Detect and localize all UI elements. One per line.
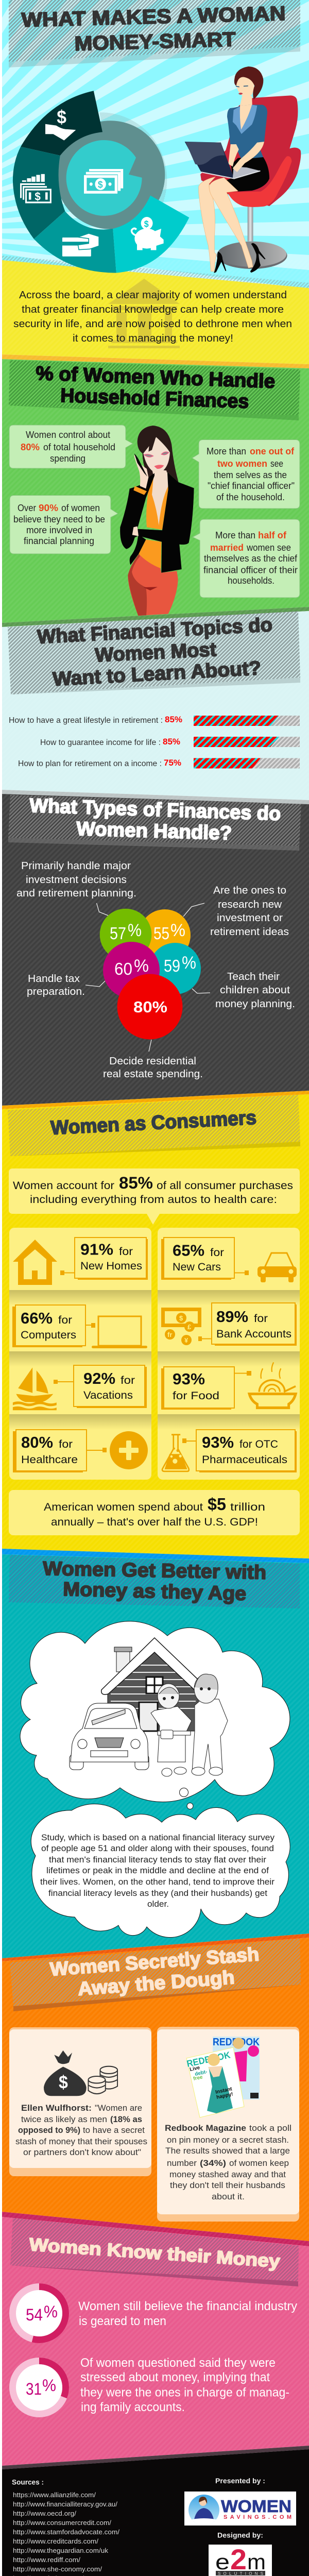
thought cloud: study text: their lives. Women, on the other hand, tend to improve their bbox=[40, 1877, 274, 1887]
text: stressed about money: ing family accounts. bbox=[81, 2400, 185, 2414]
text: stressed about money: stressed about money, implying that bbox=[80, 2370, 270, 2384]
icon: bars and banknotes bbox=[20, 174, 52, 204]
panel: $5 trillion: annually – that's over half the U.S. GDP! bbox=[51, 1516, 258, 1528]
illustration: car bbox=[70, 1703, 149, 1770]
item: OTC pharmaceuticals: 93% bbox=[202, 1433, 234, 1451]
item: bank accounts: for bbox=[254, 1312, 268, 1325]
donut: 31%: % bbox=[42, 2376, 56, 2395]
callout: half of married women: More than bbox=[215, 530, 255, 540]
heading: secret stash: Away the Dough bbox=[77, 1967, 235, 1999]
icon: banknote stack bbox=[84, 169, 123, 194]
value: 59%: % bbox=[182, 953, 196, 973]
heading: financial topics: Women Most bbox=[94, 639, 217, 666]
icon: currency coins: $ bbox=[179, 1314, 183, 1322]
item: new homes bbox=[13, 1238, 148, 1285]
item: new cars: New Cars bbox=[173, 1261, 221, 1273]
item: healthcare: for bbox=[59, 1438, 73, 1450]
item: vacations: 92% bbox=[83, 1369, 115, 1387]
callout: 90% of women: financial planning bbox=[24, 536, 94, 546]
sources list: http://www.stamfordadvocate.com/ bbox=[13, 2529, 120, 2536]
icon: card and hand bbox=[62, 233, 99, 257]
panel: $5 trillion: $5 bbox=[208, 1495, 226, 1514]
panel: 85% of consumer purchases: Women account for bbox=[13, 1179, 114, 1192]
logo: e2m Solutions bbox=[209, 2531, 272, 2576]
panel: Ellen Wulfhorst quote: "Women are bbox=[95, 2104, 142, 2113]
heading: better with age bbox=[9, 1555, 300, 1608]
text: stressed about money bbox=[80, 2356, 289, 2414]
panel: Ellen Wulfhorst quote: Ellen Wulfhorst: bbox=[21, 2104, 92, 2113]
item: computers bbox=[12, 1305, 147, 1348]
title: MONEY-SMART bbox=[74, 28, 236, 55]
value: 55%: 55 bbox=[153, 924, 169, 943]
heading: know their money bbox=[10, 2218, 299, 2286]
label: research new ideas: research new bbox=[218, 899, 282, 910]
bar chart: topics bbox=[9, 715, 300, 769]
money wheel chart with icons bbox=[13, 91, 189, 273]
callout: 80% of spending bbox=[9, 425, 133, 468]
bar: lifestyle in retirement 85%: 85% bbox=[165, 715, 182, 724]
sources list: http://www.creditcards.com/ bbox=[13, 2538, 99, 2545]
callout: 80% of spending: of total household bbox=[43, 442, 115, 452]
heading: better with age: Women Get Better with bbox=[43, 1558, 267, 1584]
logo: e2m Solutions: Designed by: bbox=[217, 2531, 263, 2539]
intro text with faint bank icon: Across the board, a clear majority of women understand bbox=[19, 289, 287, 301]
heading: types of finances: What Types of Finances do bbox=[29, 795, 281, 825]
panel: Redbook poll: (34%) bbox=[200, 2159, 226, 2168]
sources list: http://www.she-conomy.com/ bbox=[13, 2566, 102, 2573]
callout: half of married women: women see bbox=[246, 543, 291, 553]
value: 55% bbox=[153, 921, 185, 943]
panel: Ellen Wulfhorst quote bbox=[9, 2027, 151, 2176]
panel: Redbook poll: number bbox=[167, 2159, 197, 2168]
sources list: Sources : bbox=[12, 2478, 44, 2486]
logo: e2m Solutions: SOLUTIONS bbox=[218, 2571, 263, 2576]
bar: guarantee income 85%: 85% bbox=[163, 737, 180, 747]
thought cloud: study text: that men's financial literacy tends to stay flat over their bbox=[49, 1855, 266, 1865]
item: healthcare bbox=[13, 1430, 148, 1472]
heading: financial topics bbox=[8, 611, 300, 694]
sources list: https://www.allianzlife.com/ bbox=[13, 2492, 96, 2499]
label: teach children: money planning. bbox=[215, 998, 295, 1010]
icon: laptop bbox=[92, 1316, 147, 1348]
item: OTC pharmaceuticals: Pharmaceuticals bbox=[202, 1453, 287, 1466]
donut: 31%: 31 bbox=[26, 2380, 42, 2398]
title: WHAT MAKES A WOMAN bbox=[21, 3, 286, 31]
intro text with faint bank icon: that greater financial knowledge can help create more bbox=[22, 303, 284, 315]
callout: 80% of spending: spending bbox=[50, 453, 85, 464]
sources list: http://www.oecd.org/ bbox=[13, 2510, 77, 2517]
sources list: http://www.theguardian.com/uk bbox=[13, 2547, 109, 2554]
callout: chief financial officer: "chief financial officer" bbox=[208, 481, 295, 491]
label: real estate: real estate spending. bbox=[103, 1068, 203, 1080]
callout: 90% of women: believe they need to be bbox=[13, 514, 105, 524]
image: Redbook magazine covers: free bbox=[193, 2074, 203, 2082]
label: major investment decisions: and retirement planning. bbox=[16, 887, 136, 899]
panel: Redbook poll: of women keep bbox=[229, 2159, 289, 2168]
icon: hand with dollar: $ bbox=[57, 107, 66, 128]
panel: Ellen Wulfhorst quote: to have a secret bbox=[83, 2126, 145, 2135]
label: major investment decisions bbox=[16, 860, 136, 899]
sources list: http://www.financialliteracy.gov.au/ bbox=[13, 2501, 118, 2508]
icon: flask bbox=[162, 1435, 189, 1471]
intro text with faint bank icon: it comes to managing the money! bbox=[73, 332, 233, 344]
label: tax preparation: preparation. bbox=[27, 986, 85, 997]
text: industry geared to men bbox=[78, 2299, 297, 2328]
heading: women as consumers bbox=[8, 1095, 300, 1156]
callout: chief financial officer: one out of bbox=[250, 446, 295, 456]
panel: Ellen Wulfhorst quote: opposed to 9%) bbox=[18, 2126, 80, 2135]
image: Redbook magazine covers bbox=[186, 2037, 260, 2117]
callout: half of married women: half of bbox=[258, 530, 287, 540]
thought cloud: illustration bbox=[20, 1621, 290, 1809]
label: major investment decisions: investment decisions bbox=[26, 874, 127, 886]
value: 57% bbox=[110, 921, 142, 943]
text: stressed about money: they were the ones in charge of manag- bbox=[80, 2385, 289, 2400]
bar: plan for retirement 75% bbox=[18, 758, 300, 769]
item: new homes: for bbox=[119, 1245, 133, 1258]
label: teach children: children about bbox=[220, 984, 290, 996]
item: vacations: Vacations bbox=[83, 1389, 133, 1401]
panel: Redbook poll: on pin money or a secret stash. bbox=[167, 2136, 289, 2145]
callout: chief financial officer bbox=[192, 440, 300, 509]
label: tax preparation: Handle tax bbox=[28, 973, 80, 985]
image: Redbook magazine covers: Instant bbox=[215, 2086, 233, 2095]
label: tax preparation bbox=[27, 973, 85, 997]
thought cloud: study text: Study, which is based on a national financial literacy survey bbox=[41, 1833, 275, 1842]
item: OTC pharmaceuticals: for OTC bbox=[239, 1438, 278, 1450]
callout: 90% of women bbox=[10, 496, 118, 554]
callout: chief financial officer: see bbox=[270, 459, 283, 469]
panel: 85% of consumer purchases bbox=[9, 1168, 300, 1225]
value: 80%: 80% bbox=[133, 998, 167, 1016]
panel: Redbook poll bbox=[157, 2027, 299, 2222]
icon: banknote stack: $ bbox=[98, 179, 103, 190]
heading: household finances: % of Women Who Handle bbox=[36, 363, 276, 393]
value: 60% bbox=[114, 956, 149, 978]
label: teach children bbox=[215, 971, 295, 1010]
callout: 90% of women: of women bbox=[61, 503, 100, 513]
callout: 90% of women: 90% bbox=[39, 503, 58, 513]
icon: house bbox=[13, 1240, 57, 1285]
illustration: woman on red chair with laptop bbox=[185, 66, 301, 273]
icon: currency coins: £ bbox=[187, 1323, 192, 1331]
image: Redbook magazine covers: REDBOOK bbox=[186, 2049, 231, 2069]
callout: half of married women bbox=[193, 519, 300, 598]
item: new homes: New Homes bbox=[80, 1260, 142, 1272]
bar: guarantee income 85%: How to guarantee income for life : bbox=[40, 738, 161, 747]
icon: money bag and coins: $ bbox=[59, 2072, 68, 2093]
logo: Women Savings: SAVINGS.COM bbox=[224, 2514, 291, 2520]
label: teach children: Teach their bbox=[227, 971, 280, 982]
panel: Redbook poll: about it. bbox=[212, 2192, 245, 2201]
panel: Redbook poll: The results showed that a large bbox=[165, 2146, 290, 2156]
icon: bars and banknotes: $ bbox=[35, 190, 41, 203]
text: industry geared to men: Women still believe the financial industry bbox=[78, 2299, 297, 2313]
illustration: woman on the phone bbox=[120, 426, 194, 616]
callout: chief financial officer: More than bbox=[207, 446, 246, 456]
item: food: for Food bbox=[173, 1389, 219, 1402]
label: research new ideas: investment or bbox=[217, 912, 283, 924]
panel: Ellen Wulfhorst quote: or partners don't know about" bbox=[23, 2148, 141, 2157]
label: research new ideas: Are the ones to bbox=[213, 884, 286, 896]
label: real estate: Decide residential bbox=[109, 1055, 196, 1067]
heading: better with age: Money as they Age bbox=[63, 1579, 247, 1605]
sources list: http://www.consumercredit.com/ bbox=[13, 2519, 112, 2527]
item: vacations bbox=[13, 1365, 147, 1410]
item: OTC pharmaceuticals bbox=[162, 1430, 297, 1472]
heading: women as consumers: Women as Consumers bbox=[50, 1107, 257, 1139]
panel: $5 trillion: American women spend about bbox=[44, 1501, 203, 1513]
item: computers: Computers bbox=[21, 1329, 76, 1341]
callout: chief financial officer: them selves as the bbox=[214, 470, 287, 480]
icon: car bbox=[258, 1253, 297, 1282]
thought cloud: study text: financial literacy levels as they (and their husbands) get bbox=[48, 1888, 267, 1898]
item: bank accounts: 89% bbox=[216, 1308, 248, 1326]
heading: financial topics: Want to Learn About? bbox=[52, 657, 262, 690]
donut: 31% bbox=[9, 2358, 69, 2417]
callout: 80% of spending: Women control about bbox=[26, 430, 110, 440]
icon: currency coins: fr bbox=[167, 1331, 172, 1338]
callout: half of married women: married bbox=[210, 543, 244, 553]
value: 59%: 59 bbox=[164, 956, 180, 975]
panel: 85% of consumer purchases: of all consumer purchases bbox=[157, 1179, 293, 1192]
heading: financial topics: What Financial Topics do bbox=[37, 614, 273, 648]
panel: Redbook poll: they don't tell their husbands bbox=[170, 2181, 285, 2190]
bar: lifestyle in retirement 85% bbox=[9, 715, 300, 726]
logo: e2m Solutions: e bbox=[215, 2550, 230, 2574]
value: 60%: % bbox=[134, 956, 149, 976]
sources list bbox=[12, 2478, 120, 2576]
item: computers: 66% bbox=[21, 1309, 53, 1327]
label: research new ideas bbox=[210, 884, 289, 938]
logo: Women Savings bbox=[184, 2478, 296, 2526]
item: bank accounts: Bank Accounts bbox=[216, 1328, 291, 1340]
illustration: elderly man bbox=[192, 1674, 228, 1775]
image: Redbook magazine covers: Live bbox=[189, 2065, 201, 2073]
heading: types of finances: Women Handle? bbox=[76, 818, 232, 844]
title bbox=[9, 0, 300, 67]
item: new cars: for bbox=[210, 1246, 224, 1259]
panel: 85% of consumer purchases: including everything from autos to health care: bbox=[30, 1193, 277, 1206]
item: computers: for bbox=[58, 1314, 72, 1326]
thought cloud: study text: lifetimes or peak in the middle and decline at the end of bbox=[46, 1866, 269, 1875]
panel: Redbook poll: money stashed away and that bbox=[169, 2170, 286, 2179]
image: Redbook magazine covers: REDBOOK bbox=[213, 2037, 260, 2048]
item: healthcare: Healthcare bbox=[21, 1453, 78, 1466]
logo: Women Savings: WOMEN bbox=[221, 2497, 291, 2516]
heading: household finances bbox=[9, 360, 300, 420]
logo: e2m Solutions: m bbox=[247, 2550, 266, 2574]
panel: Ellen Wulfhorst quote: (18% as bbox=[110, 2115, 142, 2124]
image: Redbook magazine covers: debt- bbox=[194, 2069, 208, 2077]
item: food: 93% bbox=[173, 1370, 205, 1388]
icon: hand with dollar bbox=[45, 107, 76, 141]
icon: money bag and coins bbox=[44, 2050, 117, 2096]
item: healthcare: 80% bbox=[21, 1433, 53, 1451]
item: new cars bbox=[161, 1238, 297, 1282]
heading: secret stash bbox=[10, 1939, 301, 2011]
label: major investment decisions: Primarily handle major bbox=[21, 860, 131, 872]
icon: piggy bank: $ bbox=[144, 219, 149, 229]
panel: Redbook poll: took a poll bbox=[249, 2124, 291, 2133]
image: Redbook magazine covers: happy! bbox=[216, 2091, 234, 2100]
icon: piggy bank bbox=[132, 217, 164, 250]
bar: guarantee income 85% bbox=[40, 737, 300, 747]
panel: $5 trillion: trillion bbox=[230, 1501, 265, 1513]
bar: lifestyle in retirement 85%: How to have a great lifestyle in retirement : bbox=[9, 716, 163, 725]
item: food bbox=[161, 1362, 296, 1410]
value: 60%: 60 bbox=[114, 959, 132, 978]
thought cloud: study text: of people age 51 and older along with their spouses, found bbox=[41, 1843, 274, 1853]
panel: Ellen Wulfhorst quote: twice as likely as men bbox=[21, 2115, 107, 2124]
label: research new ideas: retirement ideas bbox=[210, 926, 289, 938]
bar: plan for retirement 75%: 75% bbox=[164, 758, 181, 768]
donut: 54% bbox=[9, 2283, 69, 2343]
heading: household finances: Household Finances bbox=[60, 385, 249, 413]
intro text with faint bank icon: security in life, and are now poised to dethrone men when bbox=[13, 318, 292, 330]
callout: half of married women: households. bbox=[228, 575, 274, 586]
heading: secret stash: Women Secretly Stash bbox=[49, 1943, 260, 1980]
callout: chief financial officer: two women bbox=[217, 459, 267, 469]
callout: chief financial officer: of the household. bbox=[216, 492, 285, 502]
item: new homes: 91% bbox=[80, 1241, 113, 1258]
logo: Women Savings: Presented by : bbox=[215, 2477, 265, 2485]
value: 59% bbox=[164, 953, 196, 975]
panel: Ellen Wulfhorst quote: stash of money that their spouses bbox=[15, 2137, 147, 2146]
value: 55%: % bbox=[170, 921, 185, 940]
panel: Redbook poll: Redbook Magazine bbox=[165, 2124, 246, 2133]
donut: 54%: % bbox=[44, 2302, 58, 2321]
callout: 80% of spending: 80% bbox=[21, 442, 40, 452]
value: 57%: % bbox=[128, 921, 142, 940]
bubble chart: types of finances bbox=[16, 860, 295, 1080]
item: vacations: for bbox=[121, 1374, 135, 1386]
illustration: house bbox=[101, 1638, 203, 1731]
item: bank accounts bbox=[163, 1303, 297, 1346]
icon: currency coins: ¥ bbox=[184, 1336, 188, 1344]
panel: $5 trillion bbox=[9, 1490, 300, 1535]
heading: know their money: Women Know their Money bbox=[28, 2234, 281, 2272]
icon: sailboat bbox=[13, 1367, 57, 1410]
thought cloud: study text bbox=[31, 1804, 290, 1938]
intro text with faint bank icon bbox=[13, 279, 292, 348]
panel: 85% of consumer purchases: 85% bbox=[119, 1174, 153, 1192]
icon: noodle bowl bbox=[249, 1362, 296, 1408]
logo: e2m Solutions: 2 bbox=[230, 2543, 247, 2575]
text: stressed about money: Of women questioned said they were bbox=[80, 2356, 276, 2370]
text: industry geared to men: is geared to men bbox=[79, 2314, 166, 2328]
callout: 90% of women: Over bbox=[18, 503, 36, 513]
icon: faint bank bbox=[108, 279, 180, 348]
value: 57%: 57 bbox=[110, 924, 126, 943]
sources list: http://www.rediff.com/ bbox=[13, 2556, 81, 2564]
label: real estate bbox=[103, 1055, 203, 1080]
thought cloud: study text: older. bbox=[147, 1899, 169, 1909]
panel: purchase categories bbox=[9, 1228, 300, 1480]
icon: currency coins bbox=[163, 1310, 200, 1345]
icon: plus circle bbox=[110, 1431, 148, 1469]
callout: half of married women: themselves as the chief bbox=[204, 553, 298, 564]
callout: half of married women: financial officer of their bbox=[203, 565, 298, 575]
heading: types of finances bbox=[8, 795, 301, 851]
illustration: elderly woman bbox=[151, 1684, 192, 1776]
item: new cars: 65% bbox=[173, 1242, 204, 1259]
donut: 54%: 54 bbox=[26, 2306, 43, 2324]
callout: 90% of women: more involved in bbox=[26, 525, 92, 535]
bar: plan for retirement 75%: How to plan for retirement on a income : bbox=[18, 759, 162, 768]
